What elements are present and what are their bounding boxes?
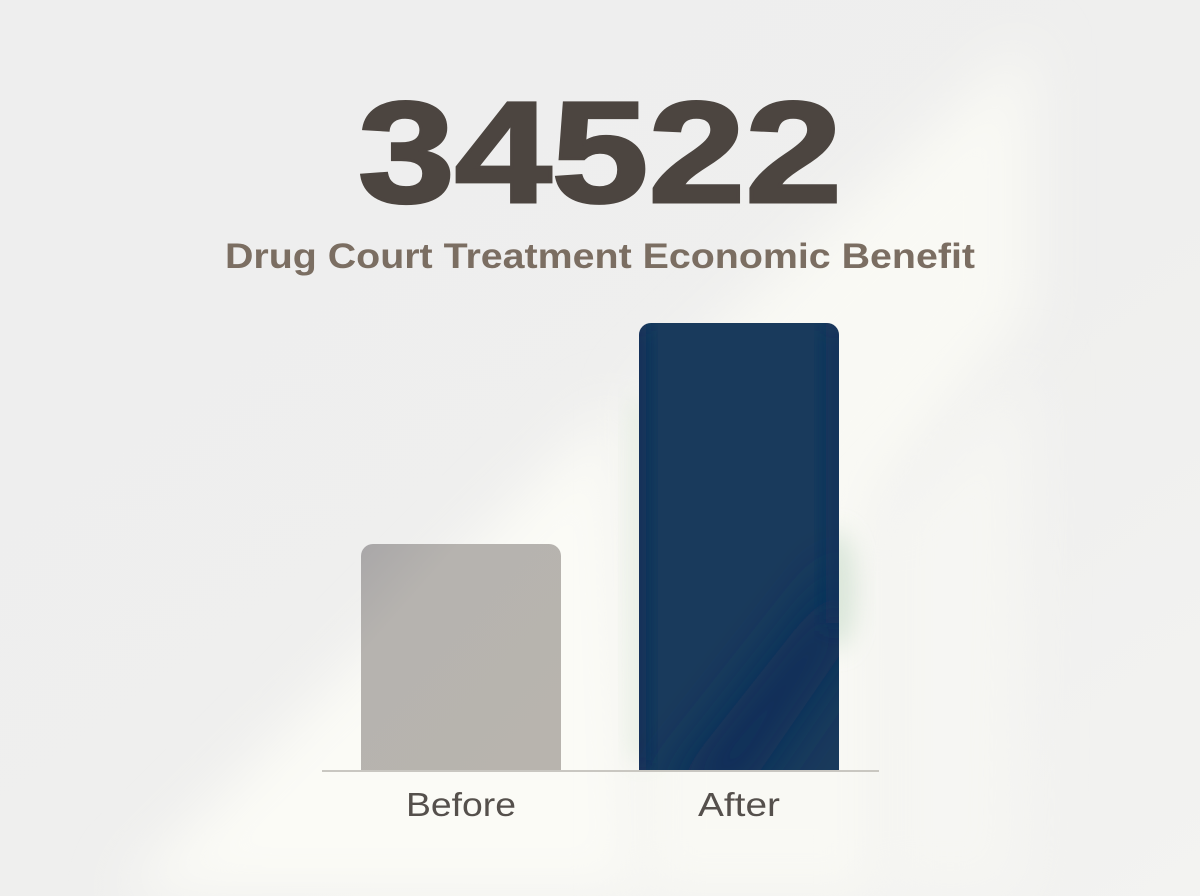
bar glow <box>630 400 856 760</box>
axis line <box>322 770 879 772</box>
bar: before <box>361 544 561 771</box>
bar chart <box>322 323 879 823</box>
headline number: 34522 <box>358 72 842 233</box>
label: before: Before <box>406 786 516 823</box>
label: after: After <box>698 786 780 823</box>
infographic canvas <box>186 100 1008 888</box>
bar: after <box>639 323 839 770</box>
subtitle: Drug Court Treatment Economic Benefit <box>225 237 975 276</box>
